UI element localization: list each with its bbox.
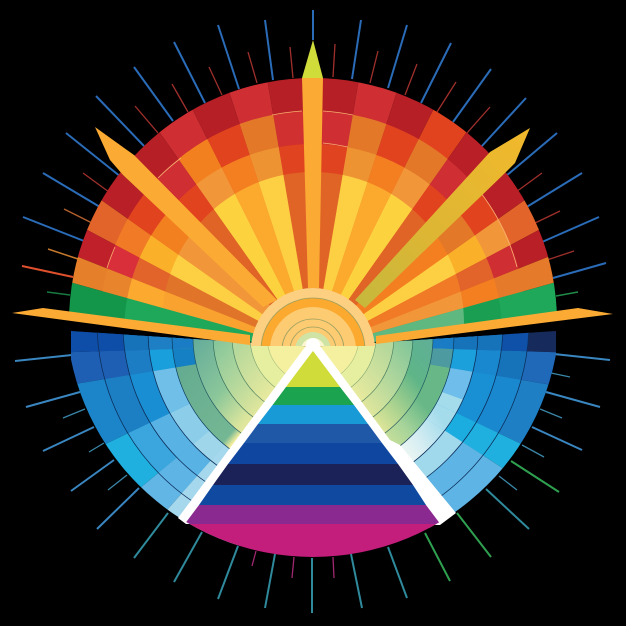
outer ring of red cells: [69, 78, 557, 342]
center vertical bar: [302, 78, 323, 288]
left diagonal bar shadow: [110, 160, 150, 200]
purple stripe: [184, 505, 441, 525]
right diagonal bar shadow: [478, 163, 515, 196]
white prism outline: [178, 339, 456, 525]
magenta base: [190, 524, 436, 557]
cyan stripe: [258, 405, 368, 424]
lower blue and teal rays: [15, 354, 610, 529]
thin light arc accents: [107, 111, 517, 268]
white core: [302, 338, 324, 346]
outer sun ring: [251, 288, 375, 346]
upper short red rays: [83, 44, 574, 260]
sun disc: [251, 288, 375, 346]
bottom green rays: [425, 461, 559, 581]
green stripe: [273, 387, 354, 405]
blue stripe: [244, 424, 382, 443]
third ring of cells: [124, 144, 501, 342]
royal blue stripe: [199, 485, 426, 505]
second ring of cells: [102, 111, 524, 342]
lower short blue rays: [63, 373, 570, 490]
second blue ring: [98, 332, 529, 494]
inner green to yellow rings: [193, 339, 433, 433]
lime tip: [286, 351, 340, 387]
right diagonal bar: [355, 128, 530, 308]
left diagonal bar: [95, 127, 277, 307]
outer blue ring: [71, 331, 556, 546]
navy stripe: [213, 464, 413, 485]
lime prism tip overlay: [286, 351, 340, 387]
striped prism triangle: [186, 352, 439, 557]
inner sun disc: [270, 307, 356, 346]
left horizontal bar: [12, 308, 250, 345]
fifth green ring: [172, 338, 454, 448]
left side coloured rays: [22, 209, 578, 296]
lime top spike: [302, 40, 323, 78]
fourth light blue ring: [148, 336, 478, 462]
bottom magenta rays: [252, 551, 334, 578]
third blue ring: [124, 334, 502, 477]
upper sunburst fan: [69, 78, 557, 346]
fine sun arcs: [260, 298, 366, 346]
lower blue fan: [71, 331, 556, 546]
right horizontal bar: [376, 308, 613, 344]
ring divider arcs: [96, 332, 529, 501]
inner long wedges: [163, 172, 464, 346]
upper long blue rays: [23, 10, 606, 278]
bottom teal rays: [134, 489, 529, 613]
prism apex glow: [306, 338, 320, 352]
deep blue stripe: [228, 443, 398, 464]
orange sun ring: [262, 298, 364, 346]
pale green core: [296, 332, 330, 346]
